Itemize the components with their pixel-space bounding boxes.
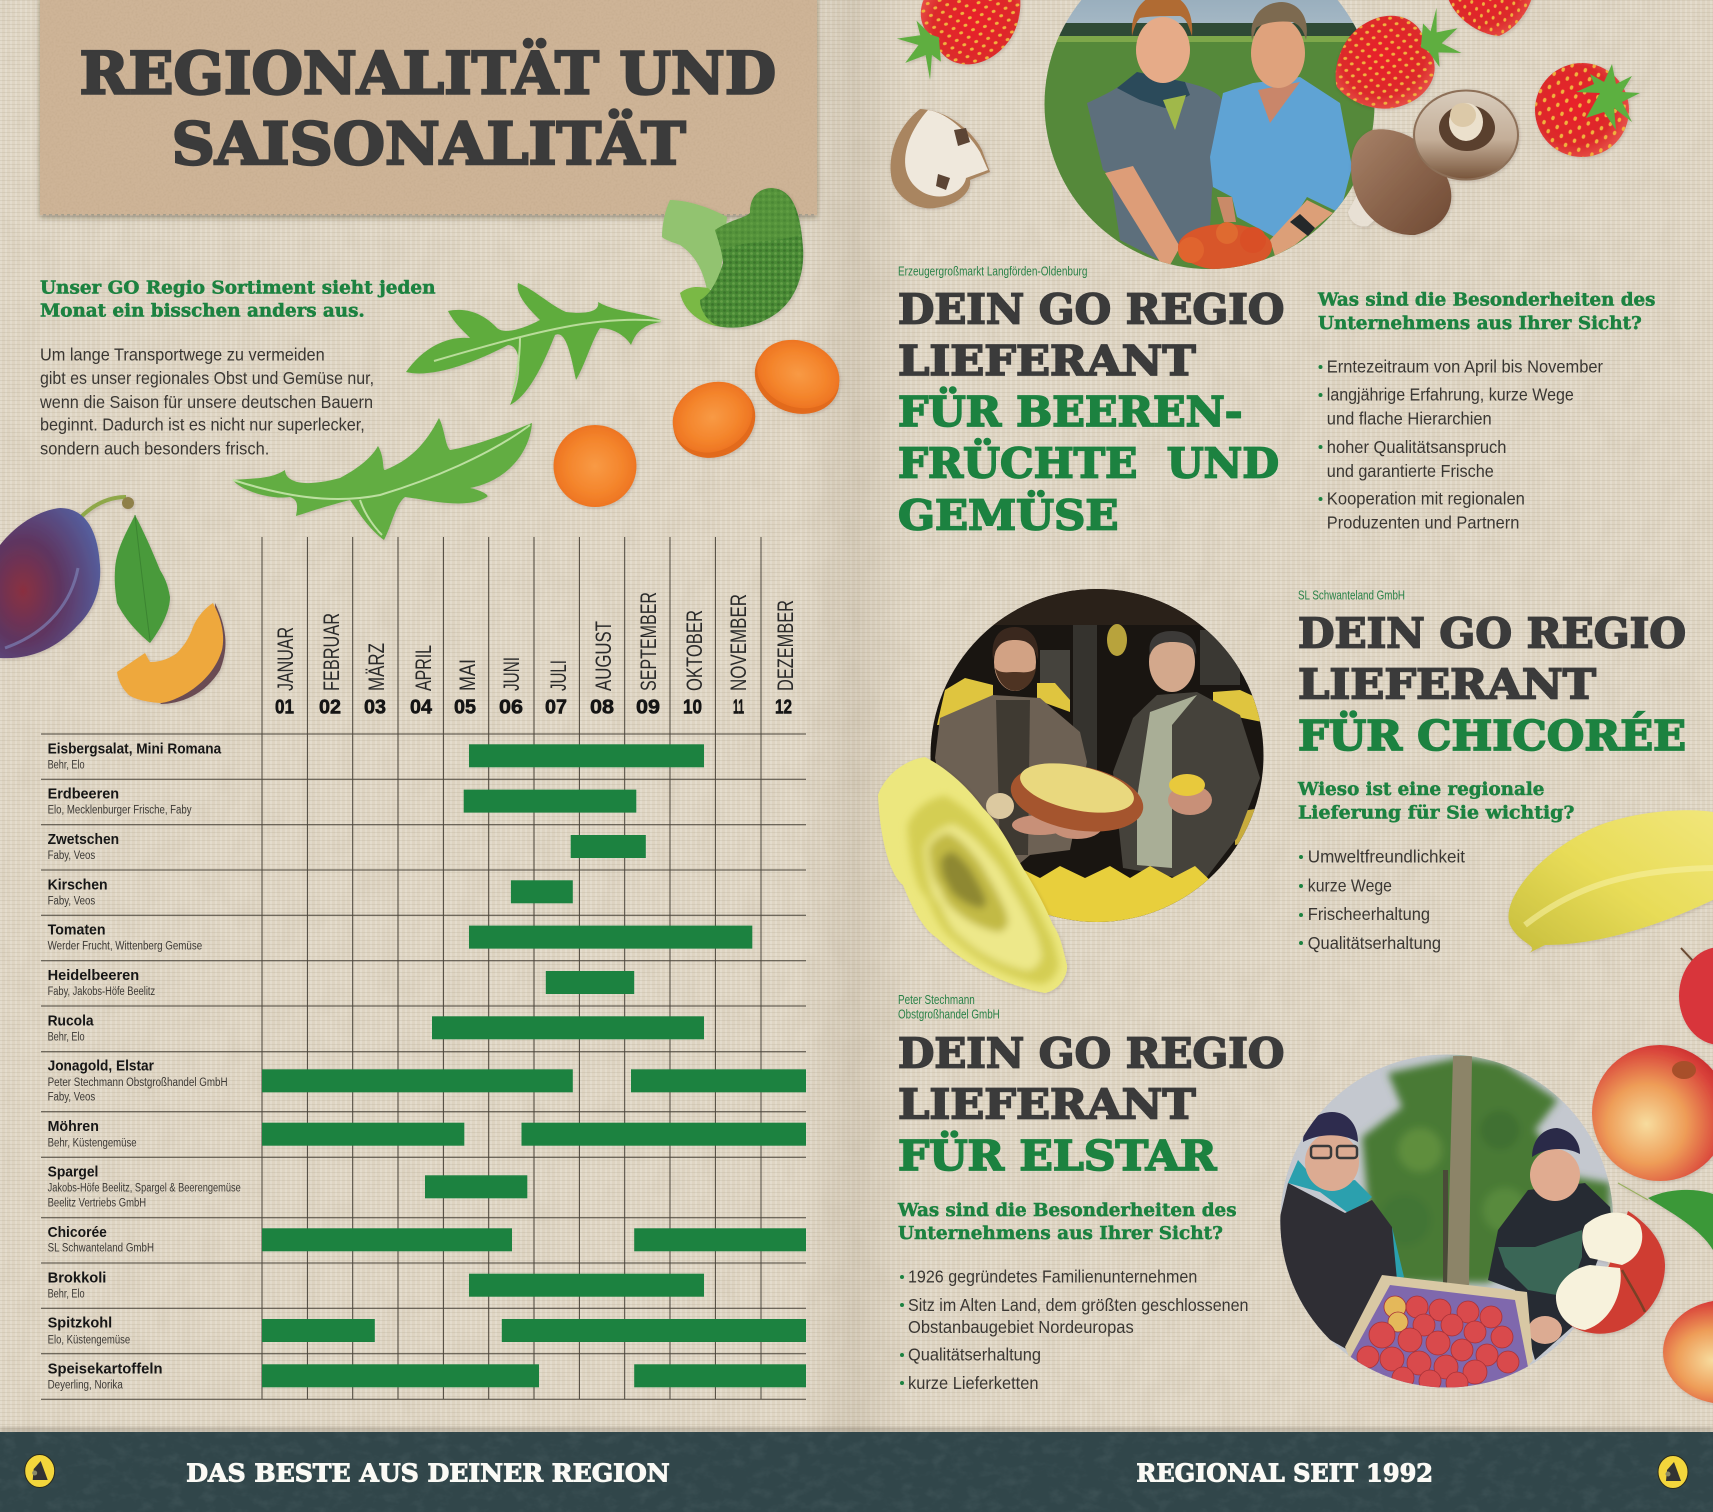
month numbers: 03 — [364, 696, 386, 718]
heading: Lieferant Beerenfrüchte: GEMÜSE — [898, 490, 1118, 539]
apple top edge — [1679, 947, 1713, 1045]
month labels: SEPTEMBER — [636, 592, 661, 691]
heading: Lieferant Beerenfrüchte: FÜR BEEREN- — [898, 387, 1242, 436]
subheading: Besonderheiten Elstar: Unternehmens aus Ihrer Sicht? — [898, 1224, 1223, 1244]
icon: right logo — [1658, 1456, 1688, 1488]
bullet list: Elstar: Qualitätserhaltung — [908, 1345, 1041, 1365]
intro text: sondern auch besonders frisch. — [40, 438, 269, 458]
intro text: gibt es unser regionales Obst und Gemüse nur, — [40, 368, 374, 388]
panel: kraft paper title card — [40, 0, 817, 214]
icon: broccoli — [662, 188, 803, 328]
heading: Lieferant Beerenfrüchte: DEIN GO REGIO — [898, 286, 1284, 334]
month numbers: 10 — [683, 696, 702, 718]
bullet list: Chicorée: Frischeerhaltung — [1308, 904, 1430, 924]
subheading: regionale Lieferung: Wieso ist eine regionale — [1297, 780, 1544, 800]
person right — [1113, 631, 1260, 882]
heading: Lieferant Beerenfrüchte — [898, 286, 1284, 539]
bullet list: Beerenfrüchte: Erntezeitraum von April bis November — [1327, 356, 1603, 376]
product labels: Faby, Veos — [48, 895, 95, 907]
bullet list: Chicorée: kurze Wege — [1308, 876, 1392, 896]
intro text — [39, 345, 374, 458]
heading: Lieferant Elstar: FÜR ELSTAR — [898, 1131, 1217, 1180]
product labels: Behr, Elo — [48, 1288, 85, 1300]
subheading: Besonderheiten: Was sind die Besonderheiten des — [1317, 290, 1656, 310]
month numbers: 11 — [733, 696, 744, 718]
halved apple — [1556, 1211, 1665, 1334]
product labels: Elo, Küstengemüse — [48, 1334, 130, 1346]
caption: Peter Stechmann: Peter Stechmann — [898, 993, 975, 1007]
heading: Lieferant Chicorée: DEIN GO REGIO — [1298, 609, 1686, 657]
icon: carrot slices — [554, 328, 850, 507]
product labels: Faby, Veos — [48, 850, 95, 862]
person left — [1087, 0, 1222, 265]
month labels: FEBRUAR — [319, 613, 344, 691]
product labels: Chicorée — [48, 1224, 107, 1241]
season bars — [262, 744, 806, 1387]
bullet list: Elstar: 1926 gegründetes Familienunternehmen — [908, 1267, 1197, 1287]
caption: Erzeugergroßmarkt: Erzeugergroßmarkt Langförden-Oldenburg — [898, 265, 1087, 279]
bullet list: Elstar: kurze Lieferketten — [908, 1373, 1038, 1393]
month labels: JULI — [546, 660, 571, 691]
whole apple — [1592, 1045, 1713, 1181]
chart grid — [41, 537, 806, 1399]
apple crate — [1345, 1275, 1533, 1395]
bullet list: Elstar: Obstanbaugebiet Nordeuropas — [908, 1317, 1134, 1337]
month labels: NOVEMBER — [726, 594, 751, 691]
month labels: APRIL — [411, 645, 436, 691]
intro heading: Monat ein bisschen anders aus. — [40, 301, 365, 321]
heading: Lieferant Elstar — [898, 1030, 1284, 1180]
icon: left logo — [25, 1454, 55, 1488]
chart: seasonal calendar — [41, 537, 806, 1399]
subheading: regionale Lieferung — [1297, 780, 1574, 823]
bullet list: Beerenfrüchte — [1318, 356, 1603, 533]
icon: brown mushrooms — [1348, 90, 1518, 235]
title: SAISONALITÄT — [172, 109, 686, 178]
product labels: Beelitz Vertriebs GmbH — [48, 1198, 146, 1210]
heading: Lieferant Beerenfrüchte: LIEFERANT — [898, 337, 1196, 385]
lower apple — [1663, 1300, 1713, 1404]
subheading: Besonderheiten Elstar: Was sind die Besonderheiten des — [897, 1201, 1237, 1221]
icon: rocket leaf bottom — [233, 418, 532, 540]
product labels: Behr, Elo — [48, 759, 85, 771]
person left — [1280, 1112, 1404, 1350]
product labels: Spitzkohl — [48, 1315, 112, 1332]
product labels: Kirschen — [48, 876, 108, 893]
month numbers: 04 — [410, 696, 433, 718]
icon: plum with leaf and slice — [0, 497, 225, 704]
person right — [1210, 2, 1352, 256]
heading: Lieferant Chicorée — [1298, 609, 1686, 760]
chicory row — [1024, 866, 1208, 922]
bullet list: Beerenfrüchte: hoher Qualitätsanspruch — [1327, 437, 1506, 457]
icon: apples — [1556, 947, 1713, 1404]
apple tree foliage — [1362, 1057, 1610, 1283]
subheading: regionale Lieferung: Lieferung für Sie wichtig? — [1298, 803, 1574, 823]
bullet list: Chicorée: Umweltfreundlichkeit — [1308, 847, 1465, 867]
caption: SL Schwanteland: SL Schwanteland GmbH — [1298, 588, 1405, 602]
month labels: MÄRZ — [364, 643, 389, 691]
product labels: SL Schwanteland GmbH — [48, 1243, 154, 1255]
icon: mushroom half — [891, 109, 990, 208]
bullet list: Elstar — [900, 1267, 1248, 1393]
subheading: Besonderheiten Elstar — [897, 1201, 1237, 1244]
bullet list: Chicorée: Qualitätserhaltung — [1308, 933, 1441, 953]
bullet list: Elstar: Sitz im Alten Land, dem größten geschlossenen — [908, 1295, 1248, 1315]
subheading: Besonderheiten: Unternehmens aus Ihrer Sicht? — [1318, 314, 1642, 334]
month labels: JANUAR — [273, 627, 298, 691]
heading: Lieferant Elstar: LIEFERANT — [898, 1080, 1196, 1128]
strawberries in hands — [1178, 222, 1272, 270]
product labels: Zwetschen — [48, 831, 119, 848]
footer left slogan: DAS BESTE AUS DEINER REGION — [186, 1459, 670, 1488]
bullet list: Beerenfrüchte: Produzenten und Partnern — [1327, 513, 1519, 533]
product labels: Behr, Küstengemüse — [48, 1138, 137, 1150]
caption: Peter Stechmann — [898, 993, 1000, 1021]
product labels: Faby, Jakobs-Höfe Beelitz — [48, 986, 155, 998]
month numbers: 05 — [454, 696, 476, 718]
product labels: Heidelbeeren — [48, 967, 139, 984]
month numbers: 12 — [775, 696, 792, 718]
intro heading: Unser GO Regio Sortiment sieht jeden — [40, 279, 436, 299]
bullet list: Chicorée — [1299, 847, 1465, 953]
product labels: Peter Stechmann Obstgroßhandel GmbH — [48, 1077, 228, 1089]
product labels — [48, 740, 241, 1391]
month labels — [273, 592, 798, 691]
photo: two men in strawberry field — [1040, 0, 1380, 276]
bullet list: Beerenfrüchte: und garantierte Frische — [1327, 461, 1494, 481]
product labels: Rucola — [48, 1012, 94, 1029]
heading: Lieferant Elstar: DEIN GO REGIO — [898, 1030, 1284, 1078]
product labels: Elo, Mecklenburger Frische, Faby — [48, 805, 192, 817]
month numbers: 06 — [499, 696, 523, 718]
footer band — [0, 1427, 1713, 1512]
product labels: Werder Frucht, Wittenberg Gemüse — [48, 941, 202, 953]
icon: rocket leaf top — [406, 283, 661, 405]
month numbers: 08 — [590, 696, 614, 718]
product labels: Jakobs-Höfe Beelitz, Spargel & Beerengemüse — [48, 1183, 241, 1195]
person right — [1488, 1128, 1612, 1360]
basket of chicory — [986, 763, 1144, 839]
icon: chicory slice — [878, 757, 1067, 993]
intro heading — [40, 279, 436, 321]
product labels: Speisekartoffeln — [48, 1360, 162, 1377]
caption: Peter Stechmann: Obstgroßhandel GmbH — [898, 1007, 1000, 1021]
bullet list: Beerenfrüchte: und flache Hierarchien — [1327, 408, 1492, 428]
product labels: Spargel — [48, 1164, 98, 1181]
month labels: DEZEMBER — [773, 600, 798, 691]
product labels: Eisbergsalat, Mini Romana — [48, 740, 222, 757]
month numbers: 01 — [275, 696, 294, 718]
product labels: Faby, Veos — [48, 1092, 95, 1104]
product labels: Behr, Elo — [48, 1031, 85, 1043]
bullet list: Beerenfrüchte: Kooperation mit regionalen — [1327, 489, 1525, 509]
product labels: Jonagold, Elstar — [48, 1058, 154, 1075]
product labels: Möhren — [48, 1118, 99, 1135]
product labels: Brokkoli — [48, 1269, 106, 1286]
subheading: Besonderheiten — [1317, 290, 1656, 334]
month numbers: 07 — [545, 696, 567, 718]
month numbers — [275, 696, 792, 718]
photo: two men with apple crate — [1275, 1050, 1620, 1395]
heading: Lieferant Chicorée: FÜR CHICORÉE — [1298, 711, 1686, 760]
month labels: JUNI — [499, 657, 524, 691]
product labels: Erdbeeren — [48, 786, 119, 803]
apple leaf — [1618, 1183, 1713, 1250]
photo: two men with chicory basket — [925, 585, 1270, 930]
heading: Lieferant Beerenfrüchte: FRÜCHTE UND — [898, 438, 1279, 488]
footer right slogan: REGIONAL SEIT 1992 — [1136, 1458, 1433, 1488]
heading: Lieferant Chicorée: LIEFERANT — [1298, 660, 1597, 708]
icon: strawberries — [878, 0, 1640, 157]
bullet list: Beerenfrüchte: langjährige Erfahrung, kurze Wege — [1327, 385, 1574, 405]
person left — [935, 627, 1087, 880]
month labels: OKTOBER — [682, 610, 707, 691]
intro text: wenn die Saison für unsere deutschen Bauern — [39, 392, 373, 412]
month labels: AUGUST — [591, 621, 616, 691]
intro text: beginnt. Dadurch ist es nicht nur superlecker, — [40, 415, 365, 435]
product labels: Tomaten — [48, 922, 106, 939]
intro text: Um lange Transportwege zu vermeiden — [40, 345, 325, 365]
icon: chicory leaf — [1508, 810, 1713, 953]
month numbers: 02 — [319, 696, 341, 718]
month numbers: 09 — [636, 696, 660, 718]
title — [80, 38, 776, 178]
month labels: MAI — [455, 659, 480, 691]
product labels: Deyerling, Norika — [48, 1379, 123, 1391]
title: REGIONALITÄT UND — [80, 38, 776, 108]
